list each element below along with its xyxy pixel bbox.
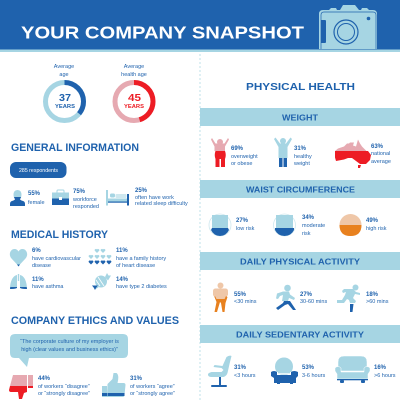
stat: under 30 mins: 55% — [234, 292, 247, 298]
stat: female: female — [28, 200, 45, 206]
stat: type 2 diabetes — [92, 273, 167, 290]
stat: agree: 31% — [130, 376, 143, 382]
icon: sprinter — [337, 284, 360, 312]
stat: family history of heart disease: have a family history — [116, 256, 166, 262]
stat: over 6 hours — [335, 356, 396, 383]
icon: waist high — [340, 214, 362, 236]
respondents pill — [10, 162, 66, 178]
icon: thumbs down — [9, 375, 33, 399]
icon: jogger — [276, 285, 296, 310]
stat: disagree: or “strongly disagree” — [38, 391, 90, 397]
stat: high risk — [340, 214, 387, 236]
stat: under 30 mins — [213, 282, 257, 312]
icon: overweight person — [211, 138, 229, 167]
stat: national average: 63% — [371, 144, 384, 150]
stat: low risk: 27% — [236, 218, 249, 224]
icon: healthy person — [274, 138, 292, 167]
stat: type 2 diabetes: 14% — [116, 277, 129, 283]
icon: armchair — [271, 358, 298, 384]
stat: sleep difficulty: often have work — [135, 195, 174, 201]
header banner — [0, 0, 400, 52]
band: daily sedentary activity — [200, 325, 400, 343]
stat: 3 to 6 hours — [271, 358, 325, 384]
stat: moderate risk: risk — [302, 231, 311, 237]
callout: culture quote: high (clear values and business ethics)” — [21, 347, 118, 353]
icon: heart — [10, 249, 27, 266]
stat: asthma — [10, 274, 64, 290]
icon: candy — [92, 273, 111, 290]
chart: average health age donut: Average — [124, 64, 144, 70]
stat: 3 to 6 hours: 3-6 hours — [302, 373, 325, 379]
chart: average age donut: age — [59, 72, 69, 78]
stat: 3 to 6 hours: 53% — [302, 365, 315, 371]
stat: asthma: 11% — [32, 277, 44, 283]
stat: family history of heart disease: 11% — [116, 248, 128, 254]
stat: moderate risk — [274, 214, 325, 237]
icon: waist moderate — [274, 214, 296, 236]
stat: healthy weight — [274, 138, 312, 167]
stat: healthy weight: healthy — [294, 154, 312, 160]
heading: medical history: MEDICAL HISTORY — [11, 229, 109, 241]
band: daily physical activity: DAILY PHYSICAL ACTIVITY — [240, 256, 360, 266]
icon: woman — [10, 190, 25, 206]
icon: australia map — [335, 140, 371, 168]
icon: sofa — [335, 356, 370, 383]
stat: national average: national — [371, 151, 390, 157]
stat: workforce: 75% — [73, 189, 86, 195]
stat: moderate risk: 34% — [302, 215, 315, 221]
stat: family history of heart disease — [89, 248, 166, 269]
band: weight — [200, 108, 400, 126]
stat: disagree: 44% — [38, 376, 51, 382]
stat: disagree: of workers “disagree” — [38, 384, 90, 390]
band: waist circumference: WAIST CIRCUMFERENCE — [246, 184, 355, 194]
icon: standing person — [213, 282, 228, 312]
stat: high risk: high risk — [366, 226, 387, 232]
stat: 30 to 60 mins — [276, 285, 327, 310]
chart: average health age donut: 45 — [128, 93, 142, 104]
stat: disagree — [9, 375, 90, 399]
icon: briefcase — [52, 190, 69, 205]
stat: over 6 hours: >6 hours — [374, 373, 396, 379]
stat: overweight — [211, 138, 258, 167]
stat: family history of heart disease: of heart disease — [116, 263, 155, 269]
stat: overweight: or obese — [231, 161, 252, 167]
stat: national average — [335, 140, 391, 168]
stat: type 2 diabetes: have type 2 diabetes — [116, 284, 167, 290]
icon: office chair — [208, 356, 232, 387]
stat: under 3 hours: 31% — [234, 365, 247, 371]
chart: average age donut: YEARS — [55, 104, 75, 110]
icon: lungs — [10, 274, 27, 289]
heading: general information: GENERAL INFORMATION — [11, 142, 139, 154]
chart: average age donut — [46, 64, 84, 120]
stat: cardiovascular disease: disease — [32, 263, 51, 269]
chart: average health age donut — [115, 64, 153, 120]
stat: workforce: responded — [73, 204, 99, 210]
chart: average health age donut: health age — [121, 72, 147, 78]
stat: agree: of workers “agree” — [130, 384, 175, 390]
chart: average health age donut: YEARS — [124, 104, 144, 110]
stat: under 3 hours: <3 hours — [234, 373, 256, 379]
stat: low risk — [209, 214, 255, 236]
stat: sleep difficulty — [106, 188, 188, 207]
stat: moderate risk: moderate — [302, 223, 325, 229]
stat: workforce: workforce — [72, 197, 97, 203]
stat: over 60 mins: 18% — [366, 292, 379, 298]
stat: cardiovascular disease — [10, 248, 81, 269]
stat: female: 55% — [28, 191, 41, 197]
icon: camera — [319, 5, 377, 49]
stat: workforce — [52, 189, 99, 210]
callout: culture quote — [10, 334, 128, 367]
stat: over 60 mins: >60 mins — [366, 299, 389, 305]
icon: hearts grid — [89, 249, 111, 264]
stat: cardiovascular disease: have cardiovascular — [32, 256, 81, 262]
stat: sleep difficulty: 25% — [135, 188, 148, 194]
chart: average age donut: Average — [54, 64, 74, 70]
stat: agree: or “strongly agree” — [130, 391, 175, 397]
stat: low risk: low risk — [236, 226, 255, 232]
icon: waist low — [209, 214, 231, 236]
stat: agree — [102, 373, 175, 397]
stat: healthy weight: 31% — [294, 146, 307, 152]
heading: physical health: PHYSICAL HEALTH — [246, 82, 355, 93]
title: YOUR COMPANY SNAPSHOT — [21, 22, 304, 42]
stat: over 6 hours: 16% — [374, 365, 387, 371]
stat: under 30 mins: <30 mins — [234, 299, 257, 305]
stat: 30 to 60 mins: 27% — [300, 292, 313, 298]
callout: culture quote: “The corporate culture of my employer is — [20, 339, 119, 345]
stat: overweight: overweight — [231, 154, 258, 160]
stat: female — [10, 190, 45, 206]
stat: under 3 hours — [208, 356, 256, 387]
icon: bed — [106, 190, 129, 206]
band: waist circumference — [200, 180, 400, 198]
stat: sleep difficulty: related sleep difficulty — [135, 201, 188, 207]
stat: 30 to 60 mins: 30-60 mins — [300, 299, 327, 305]
stat: high risk: 49% — [366, 218, 379, 224]
stat: asthma: have asthma — [32, 284, 64, 290]
stat: over 60 mins — [337, 284, 389, 312]
band: weight: WEIGHT — [282, 112, 319, 122]
stat: cardiovascular disease: 6% — [32, 248, 41, 254]
chart: average age donut: 37 — [59, 93, 71, 104]
stat: overweight: 69% — [231, 146, 244, 152]
stat: national average: average — [371, 159, 391, 165]
icon: thumbs up — [102, 373, 126, 397]
stat: healthy weight: weight — [293, 161, 310, 167]
respondents pill: 285 respondents — [19, 168, 58, 174]
band: daily sedentary activity: DAILY SEDENTARY ACTIVITY — [236, 330, 364, 340]
heading: company ethics and values: COMPANY ETHICS AND VALUES — [11, 315, 179, 327]
band: daily physical activity — [200, 252, 400, 270]
